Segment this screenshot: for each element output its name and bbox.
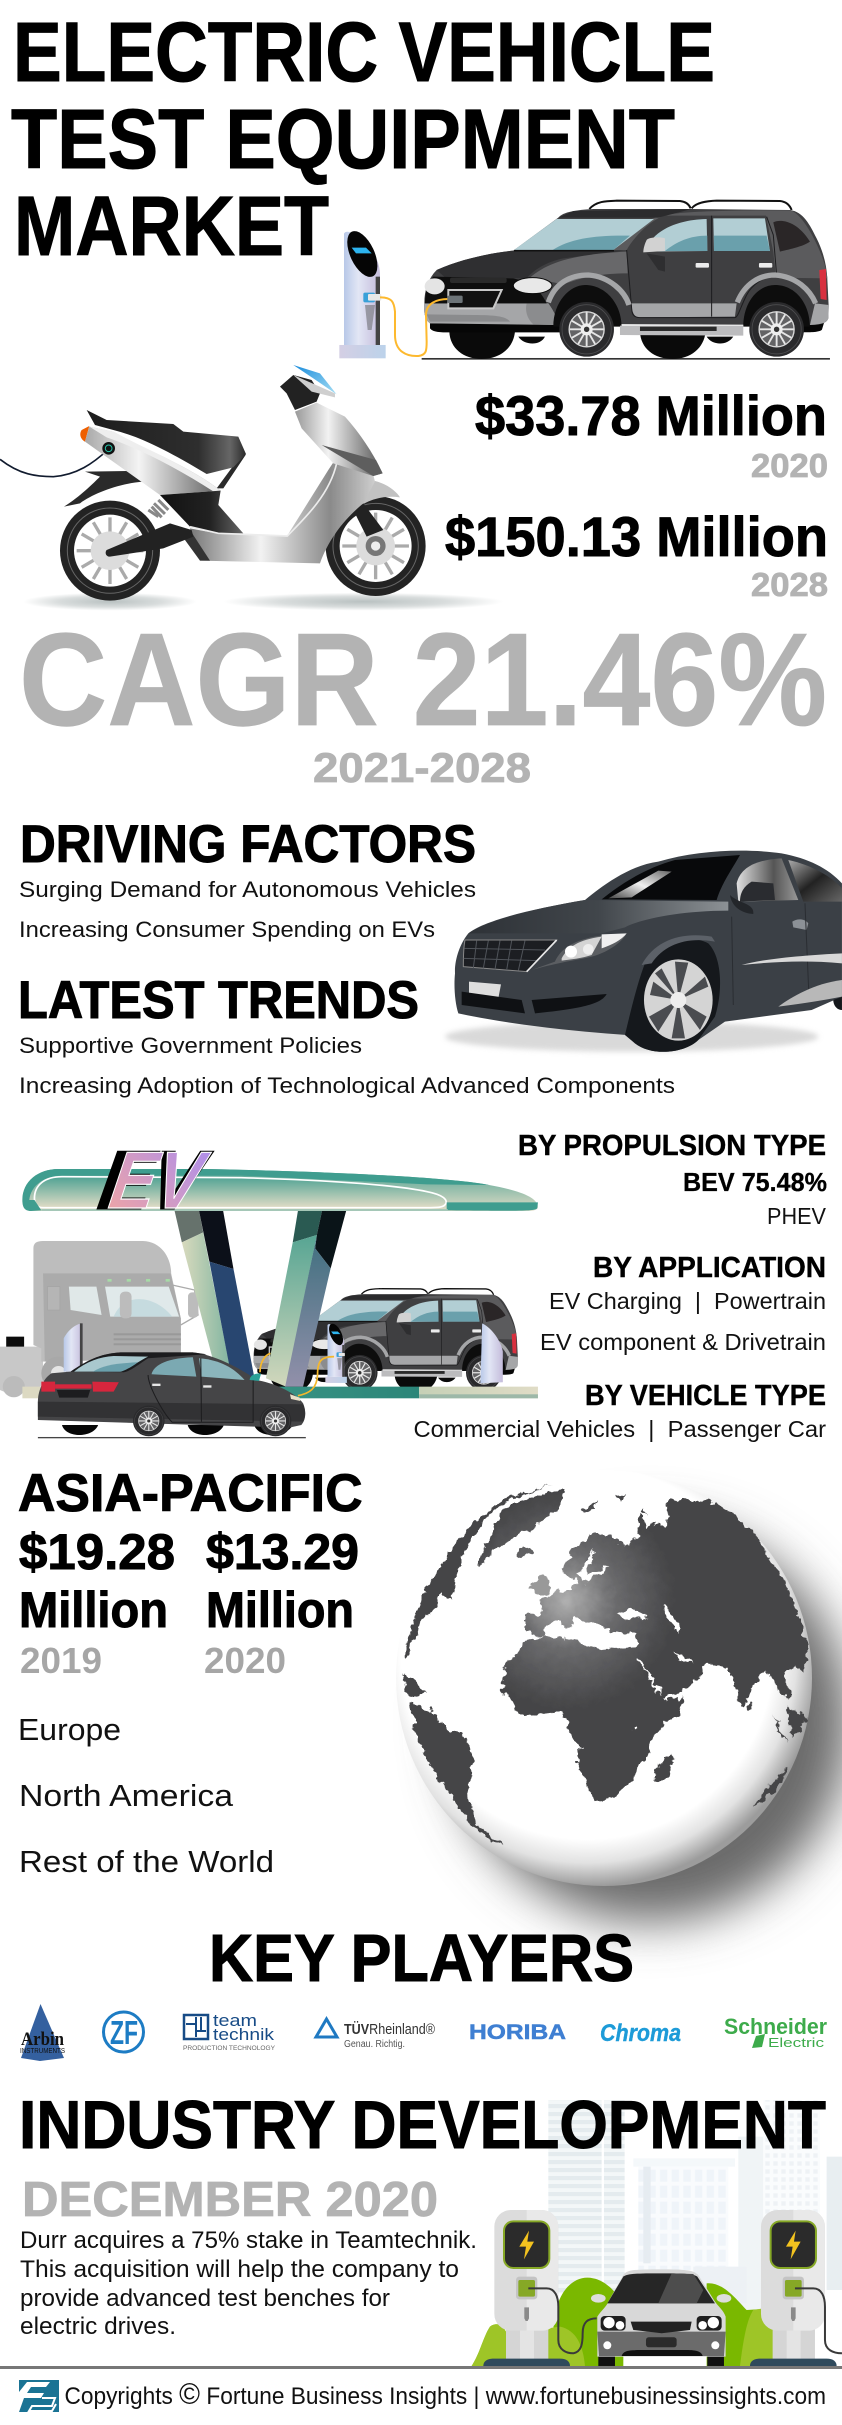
unit 2020: Million bbox=[206, 1582, 354, 1638]
development description bbox=[20, 2227, 477, 2340]
heading: by application: BY APPLICATION bbox=[593, 1252, 826, 1284]
development description: Durr acquires a 75% stake in Teamtechnik. bbox=[20, 2227, 477, 2254]
date: December 2020: DECEMBER 2020 bbox=[22, 2173, 438, 2227]
heading: by propulsion type: BY PROPULSION TYPE bbox=[518, 1130, 826, 1162]
PHEV: PHEV bbox=[767, 1203, 827, 1229]
logo: team technik: technik bbox=[213, 2025, 275, 2044]
development description: provide advanced test benches for bbox=[20, 2285, 390, 2312]
value: 2028 market size: $150.13 Million bbox=[445, 505, 828, 568]
logo: TUV Rheinland: Genau. Richtig. bbox=[344, 2039, 405, 2050]
logo: team technik: PRODUCTION TECHNOLOGY bbox=[183, 2045, 276, 2052]
unit 2019: Million bbox=[19, 1582, 168, 1638]
icon: left charging point bbox=[483, 2210, 570, 2366]
logo: TUV Rheinland bbox=[316, 2019, 435, 2050]
label: 2028: 2028 bbox=[751, 566, 828, 603]
logo: Fortune Business Insights bbox=[19, 2380, 59, 2412]
title: MARKET bbox=[14, 179, 329, 273]
year 2019: 2019 bbox=[20, 1640, 102, 1681]
logo: Arbin: Arbin bbox=[21, 2029, 64, 2050]
EV sign: EV bbox=[104, 1136, 215, 1226]
BEV share: BEV 75.48% bbox=[683, 1167, 827, 1197]
heading: by vehicle type: BY VEHICLE TYPE bbox=[585, 1380, 826, 1412]
development description: electric drives. bbox=[20, 2313, 176, 2340]
canopy platform and pillars bbox=[22, 1169, 538, 1398]
driving factors bbox=[19, 815, 476, 942]
logo: Arbin bbox=[20, 2004, 65, 2061]
icon: electric scooter bbox=[0, 365, 503, 611]
illustration: car between charging points bbox=[472, 2210, 842, 2366]
region: Europe: Europe bbox=[18, 1712, 121, 1747]
factor 2: Increasing Consumer Spending on EVs bbox=[19, 917, 435, 942]
regional figures bbox=[18, 1464, 362, 1879]
title bbox=[11, 5, 715, 273]
heading: key players: KEY PLAYERS bbox=[209, 1921, 634, 1996]
logo: ZF bbox=[104, 2012, 144, 2052]
trend 2: Increasing Adoption of Technological Advanced Components bbox=[19, 1073, 675, 1098]
logo: team technik: team bbox=[213, 2011, 257, 2030]
title: ELECTRIC VEHICLE bbox=[13, 5, 715, 99]
heading: Asia-Pacific: ASIA-PACIFIC bbox=[18, 1464, 362, 1523]
label: 2020: 2020 bbox=[751, 447, 828, 484]
icon: front view car bbox=[591, 2269, 731, 2366]
divider bbox=[0, 2366, 842, 2369]
icon: globe bbox=[396, 1470, 842, 1922]
logo: HORIBA: HORIBA bbox=[469, 2021, 566, 2044]
logo: ZF: ZF bbox=[110, 2014, 138, 2051]
segmentation bbox=[414, 1130, 827, 1442]
application items: EV Charging | Powertrain bbox=[549, 1288, 826, 1314]
market size figures bbox=[445, 384, 828, 603]
title: TEST EQUIPMENT bbox=[11, 92, 675, 186]
application items 2: EV component & Drivetrain bbox=[540, 1329, 826, 1355]
value: 2020 market size: $33.78 Million bbox=[475, 384, 827, 447]
vehicle types: Commercial Vehicles | Passenger Car bbox=[414, 1416, 826, 1442]
company logos bbox=[20, 2004, 827, 2061]
trend 1: Supportive Government Policies bbox=[19, 1033, 362, 1058]
icon: dark sedan bbox=[38, 1352, 334, 1438]
heading: latest trends: LATEST TRENDS bbox=[18, 971, 419, 1030]
logo: Schneider Electric bbox=[724, 2014, 827, 2050]
icon: charging cables bbox=[528, 2288, 842, 2353]
logo: team technik bbox=[183, 2011, 276, 2052]
copyright line: Copyrights © Fortune Business Insights | www.fortunebusinessinsights.com bbox=[64, 2378, 826, 2411]
value 2020: $13.29 bbox=[206, 1524, 359, 1580]
development description: This acquisition will help the company to bbox=[20, 2256, 459, 2283]
icon: charger bbox=[325, 1322, 347, 1383]
icon: right charging point bbox=[750, 2210, 837, 2366]
icon: SUV at charging station bbox=[339, 201, 830, 360]
value 2019: $19.28 bbox=[19, 1524, 175, 1580]
CAGR period: 2021-2028 bbox=[313, 744, 531, 791]
region: Rest of the World: Rest of the World bbox=[19, 1844, 274, 1879]
factor 1: Surging Demand for Autonomous Vehicles bbox=[19, 877, 476, 902]
logo: Schneider Electric: Electric bbox=[768, 2035, 825, 2050]
logo: Schneider Electric: Schneider bbox=[724, 2014, 827, 2039]
latest trends bbox=[18, 971, 675, 1098]
background: city buildings bbox=[548, 2100, 842, 2310]
year 2020: 2020 bbox=[204, 1640, 286, 1681]
heading: driving factors: DRIVING FACTORS bbox=[20, 815, 476, 874]
icon: grey truck bbox=[0, 1241, 198, 1397]
region: North America: North America bbox=[19, 1778, 234, 1813]
icon: grey sedan bbox=[445, 851, 842, 1052]
icon: SUV under canopy bbox=[253, 1289, 518, 1392]
logo: Arbin: INSTRUMENTS bbox=[20, 2048, 65, 2055]
footer bbox=[0, 2366, 842, 2412]
EV sign: EV bbox=[94, 1136, 216, 1226]
logo: Chroma: Chroma bbox=[600, 2020, 681, 2047]
logo: TUV Rheinland: TÜVRheinland® bbox=[344, 2021, 435, 2038]
illustration: EV charging station bbox=[0, 1136, 538, 1438]
